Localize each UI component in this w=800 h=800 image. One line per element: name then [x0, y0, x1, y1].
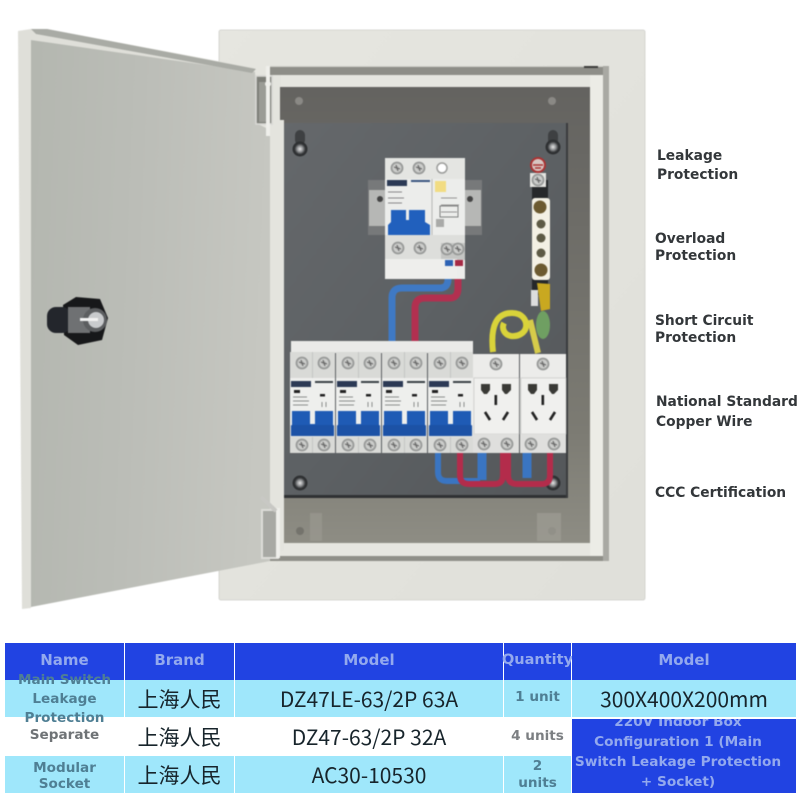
box outer frame: [219, 30, 645, 600]
row 1 name text: Leakage: [32, 691, 97, 707]
label: ccc certification: CCC Certification: [655, 485, 786, 501]
main leakage protection breaker: [385, 158, 465, 279]
header: model: Model: [343, 651, 395, 669]
row 1: dimensions: 300X400X200mm: [600, 684, 768, 714]
row 1: dimensions: [572, 680, 796, 717]
header: model: [235, 643, 503, 680]
label: overload protection: [655, 231, 736, 264]
top hinge: [256, 66, 272, 136]
label: short circuit protection: Protection: [655, 330, 736, 346]
row 3: quantity: 2: [533, 758, 542, 774]
miniature breakers row: [290, 352, 473, 453]
row 3: brand: [125, 756, 234, 793]
row 1 name text: [18, 672, 111, 726]
specification table: [5, 643, 796, 793]
label: national standard copper wire: Copper Wire: [656, 414, 752, 430]
bottom hinge: [261, 497, 278, 558]
mounting plate: [283, 123, 568, 498]
row 2: quantity: [504, 717, 571, 755]
box cavity: [280, 87, 590, 543]
label: overload protection: Protection: [655, 248, 736, 264]
row 1: quantity: 1 unit: [515, 688, 560, 704]
merged configuration cell: [572, 719, 796, 793]
box inner lip: [270, 75, 603, 556]
row 3: model: AC30-10530: [312, 760, 426, 790]
row 1 background: name: [5, 680, 124, 717]
row 3: quantity: [504, 756, 571, 793]
merged configuration cell: + Socket): [641, 774, 715, 790]
wires: lower links: [438, 450, 550, 484]
label: leakage protection: Leakage: [657, 148, 722, 164]
label: short circuit protection: Short Circuit: [655, 313, 753, 329]
label: short circuit protection: [655, 313, 754, 346]
row 2 name text: Separate: [30, 727, 99, 743]
row 1 name text: Main Switch: [18, 672, 111, 688]
label: leakage protection: Protection: [657, 167, 738, 183]
header: name: Name: [40, 651, 89, 669]
row 1: quantity: [504, 680, 571, 717]
wires: main feed blue and red: [392, 258, 458, 345]
row 3 background: name: [5, 756, 124, 793]
row 3: model: [235, 756, 503, 793]
header: quantity: [504, 643, 571, 680]
row 1: brand: [125, 680, 234, 717]
row 3: quantity: units: [518, 774, 557, 790]
label: national standard copper wire: [656, 394, 798, 430]
row 2: model: [235, 718, 503, 756]
row 2: quantity: 4 units: [511, 728, 564, 744]
product photo: open distribution box: [18, 28, 646, 610]
merged configuration cell: Configuration 1 (Main: [594, 734, 762, 750]
row 3 name text: Socket: [39, 776, 90, 792]
label: leakage protection: [657, 148, 738, 183]
row 1 name text: Protection: [25, 710, 104, 726]
row 2: model: DZ47-63/2P 32A: [292, 722, 446, 752]
modular sockets: [473, 354, 566, 453]
door inner edge strip: [258, 120, 284, 563]
top busbar cover: [291, 341, 473, 353]
row 3 name text: [33, 760, 96, 792]
door: [18, 29, 270, 609]
header: name: [5, 643, 124, 680]
row 1: brand: 上海人民: [138, 684, 222, 714]
header: dimensions model: Model: [658, 651, 710, 669]
row 3 name text: Modular: [33, 760, 96, 776]
row 3: brand: 上海人民: [138, 760, 222, 790]
header: brand: Brand: [154, 651, 205, 669]
row 2: brand: 上海人民: [138, 722, 222, 752]
row 1: model: DZ47LE-63/2P 63A: [280, 684, 458, 714]
din rail behind main breaker: [368, 180, 482, 235]
ground bar and wires: [492, 158, 550, 353]
door lock: [47, 297, 108, 345]
label: national standard copper wire: National Standard: [656, 394, 798, 410]
header: quantity: Quantity: [502, 652, 573, 668]
row 1: model: [235, 680, 503, 717]
row 2: brand: [125, 718, 234, 756]
header: dimensions model: [572, 643, 796, 680]
header: brand: [125, 643, 234, 680]
merged configuration cell: Switch Leakage Protection: [575, 754, 781, 770]
label: overload protection: Overload: [655, 231, 725, 247]
